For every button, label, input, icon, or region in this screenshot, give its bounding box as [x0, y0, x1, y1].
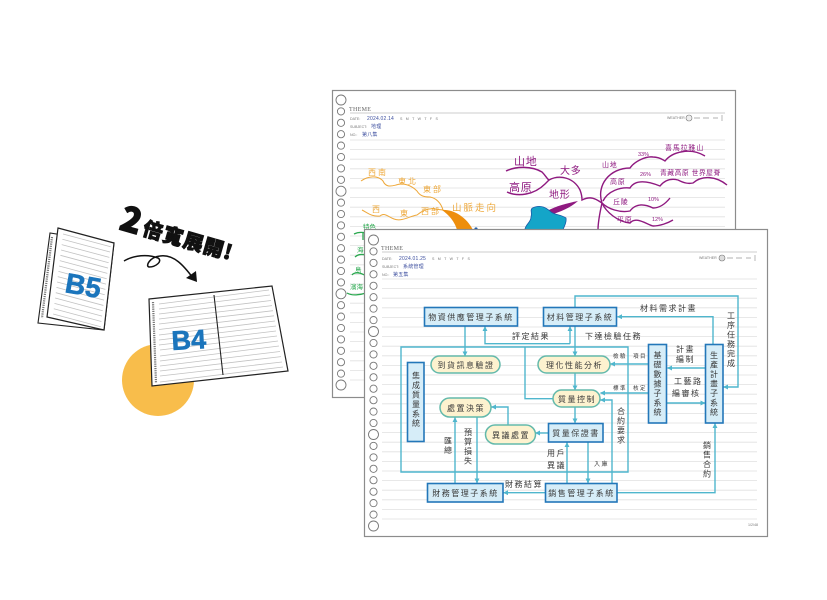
connector: sales to production plan: [617, 424, 715, 493]
connector: loop to quality control: [525, 347, 553, 399]
box: quality certificate: [548, 424, 603, 442]
box: base data subsystem: 基礎數據子系統: [653, 350, 662, 417]
flow labels: 工序任務完成: [726, 312, 736, 368]
page header: WEATHER: [699, 256, 717, 260]
pill: physical analysis: [538, 356, 610, 373]
flow labels: 檢驗: [613, 352, 627, 360]
connector: base data to analysis: [610, 363, 648, 365]
connector: base data to quality control: [600, 392, 648, 394]
pill: objection handling: 異議處置: [492, 430, 530, 440]
connector: sales to quality control: [600, 400, 612, 483]
flow labels: 用戶: [547, 448, 566, 458]
mind map: green branch: 海: [357, 245, 364, 254]
page header: SUBJECT:: [382, 265, 399, 269]
box: materials management: [544, 308, 616, 326]
box: base data subsystem: [648, 344, 666, 423]
flow labels: 材料需求計畫: [640, 303, 697, 313]
flow labels: 1/2/48: [748, 523, 758, 527]
connector: evaluation result to supply: [485, 326, 570, 344]
flow labels: 編制: [676, 354, 695, 364]
mind map: terrain types (purple): 丘陵: [613, 197, 629, 206]
page header: THEME: [381, 246, 403, 252]
mind map: terrain types (purple): 高原: [610, 177, 626, 186]
page header: WEATHER: [667, 116, 685, 120]
connector: analysis to quality control: [574, 373, 576, 390]
box: finance management: 財務管理子系統: [432, 488, 499, 498]
page header: [381, 246, 757, 278]
headline: 2x wider: 倍寬展開!: [140, 213, 237, 266]
connector: base data to plan: [667, 402, 705, 404]
mind map: terrain types (purple): 青藏高原 世界屋脊: [660, 168, 721, 177]
page header: NO.:: [382, 273, 389, 277]
connector: central quality loop: [401, 347, 628, 472]
page header: 2024.01.25: [399, 256, 426, 262]
connector: plan to base data: [668, 367, 705, 369]
B5 label: B5: [63, 267, 104, 304]
flow labels: 異議: [547, 460, 566, 470]
page header: 第五集: [393, 271, 409, 278]
page header: 地理: [371, 123, 381, 130]
box: supply management: [424, 308, 518, 326]
mind map: mountain directions (orange): [361, 167, 498, 231]
mind map: terrain types (purple): 山地: [514, 155, 538, 168]
flow labels: 項目: [633, 353, 647, 360]
flow labels: 合約要求: [616, 406, 626, 445]
connector: objection to disposal: [492, 407, 508, 425]
mind map: terrain types (purple): 山地: [602, 160, 618, 169]
page header: NO.:: [350, 133, 357, 137]
connector: finance up to disposal: [454, 418, 456, 483]
connector: certificate to objection: [536, 432, 548, 434]
flow labels: 標準: [613, 384, 627, 392]
box: production plan subsystem: [706, 344, 723, 423]
back note page: geography mind map: [332, 90, 736, 398]
page header: DATE:: [382, 257, 392, 261]
mind map: mountain directions (orange): 西: [372, 205, 382, 214]
box: quality certificate: 質量保證書: [552, 428, 600, 438]
connector: quality control to certificate: [574, 407, 576, 423]
connector: materials to plan: [575, 296, 738, 387]
connector: evaluation result to materials: [569, 326, 571, 344]
mind map: mountain directions (orange): 西南: [368, 167, 388, 177]
mind map: blue map shape: [525, 206, 566, 230]
mind map: terrain types (purple): 大多: [560, 164, 582, 177]
box: sales management: 銷售管理子系統: [548, 488, 615, 498]
flow labels: 預算損失: [464, 428, 472, 466]
mind map: terrain types (purple): 26%: [640, 172, 651, 178]
flow labels: 編審核: [672, 388, 700, 398]
connector: sales to finance: [504, 492, 545, 494]
pill: objection handling: [486, 425, 536, 444]
pill: physical analysis: 理化性能分析: [546, 360, 603, 370]
mind map: mountain directions (orange): 東部: [423, 184, 443, 194]
flow labels: 財務結算: [505, 479, 543, 489]
connector: plan to materials: [618, 317, 713, 344]
box: supply management: 物資供應管理子系統: [428, 312, 514, 322]
connector: materials to physical analysis: [574, 326, 576, 356]
mind map: mountain directions (orange): 山脈走向: [452, 202, 498, 214]
pill: arrival check: 到貨訊息驗證: [438, 360, 494, 370]
flow labels: 核定: [633, 384, 647, 392]
page header: 系統管理: [403, 263, 424, 270]
page header: 第八集: [362, 131, 378, 138]
ruled lines: [382, 279, 757, 519]
front note page: system flowchart: [364, 230, 768, 536]
mind map: terrain types (purple): 33%: [638, 152, 649, 158]
mind map: terrain types (purple): 高原: [509, 180, 533, 194]
box: finance management: [428, 484, 503, 502]
pill: quality control: [553, 390, 600, 407]
flow labels: 評定結果: [512, 331, 550, 341]
page header: [349, 107, 725, 138]
connector: sales to certificate: [566, 442, 568, 483]
flow labels: 入庫: [594, 460, 609, 468]
pill: disposal decision: 處置決策: [447, 403, 485, 413]
B4 label: B4: [171, 324, 207, 356]
page header: 2024.02.14: [367, 116, 394, 122]
binder rings: [336, 95, 346, 390]
arrow: B5 to B4: [124, 256, 197, 282]
flow labels: 銷售合約: [702, 440, 712, 479]
box: integrated quality system: 集成質量系統: [412, 371, 420, 428]
pill: arrival check: [431, 356, 500, 373]
headline: 2x wider: 2: [115, 192, 149, 244]
mind map: terrain types (purple): 10%: [648, 197, 659, 203]
mind map: terrain types (purple): 地形: [549, 188, 571, 201]
mind map: green branch: 特色: [363, 222, 376, 231]
mind map: mountain directions (orange): 西部: [421, 206, 441, 216]
mind map: mountain directions (orange): 東: [400, 208, 410, 218]
page header: SUBJECT:: [350, 125, 367, 129]
mind map: mountain directions (orange): 東北: [398, 176, 418, 186]
mind map: green branch: [347, 222, 376, 295]
flow labels: [444, 303, 758, 527]
B4 notebook icon: [149, 286, 288, 386]
ruled lines: [350, 140, 725, 380]
flow labels: 匯總: [444, 436, 452, 456]
box: sales management: [546, 484, 617, 502]
mind map: terrain types (purple): 喜馬拉雅山: [665, 143, 704, 152]
page header: S M T W T F S: [400, 117, 439, 121]
headline: 2x wider: [115, 192, 241, 271]
mind map: green branch: 島: [355, 265, 362, 274]
pill: quality control: 質量控制: [558, 394, 596, 404]
binder rings: [368, 235, 378, 531]
mind map: green branch: 濱海: [350, 282, 364, 291]
page header: THEME: [349, 107, 371, 113]
yellow circle: [122, 344, 194, 416]
connector: certificate to sales: [587, 442, 589, 483]
page header: S M T W T F S: [432, 257, 471, 261]
flow labels: 計畫: [676, 344, 695, 354]
connector: disposal down to finance: [476, 417, 478, 483]
mind map: terrain types (purple): 平原: [617, 216, 633, 224]
page header: DATE:: [350, 117, 360, 121]
mind map: terrain types (purple): [506, 143, 727, 230]
connector: supply to arrival check: [464, 326, 466, 356]
mind map: terrain types (purple): 12%: [652, 217, 663, 223]
box: integrated quality system: [408, 362, 424, 442]
pill: disposal decision: [440, 398, 491, 417]
box: materials management: 材料管理子系統: [547, 312, 613, 322]
flow labels: 工藝路: [674, 376, 702, 386]
box: production plan subsystem: 生產計畫子系統: [710, 350, 718, 417]
B5 notebook icon: [38, 228, 114, 330]
flow labels: 下達檢驗任務: [585, 331, 642, 341]
